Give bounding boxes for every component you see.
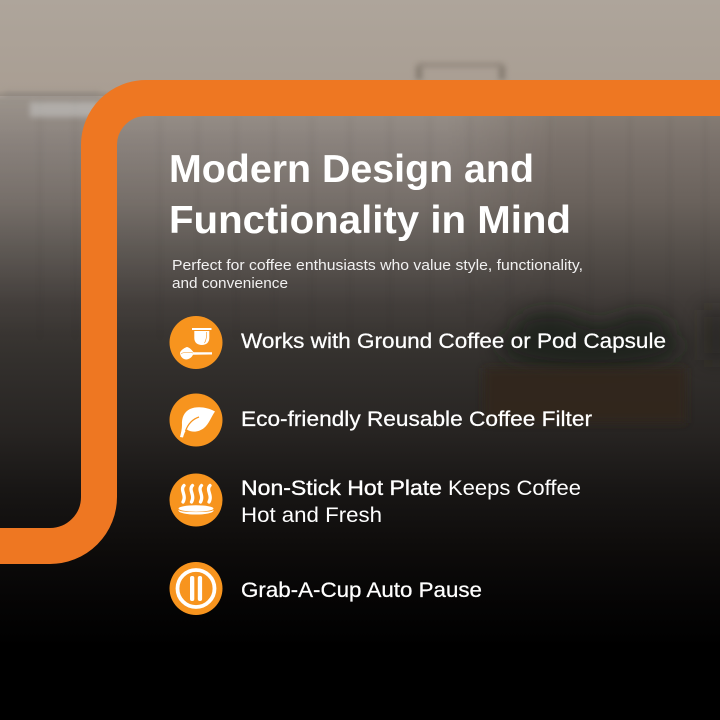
icon: leaf [170,394,222,446]
text: Eco-friendly Reusable Coffee Filter [241,407,592,431]
feature: reusable filter [170,394,592,446]
icon: pause button [170,562,222,615]
text: Keeps Coffee [448,476,581,500]
feature: ground coffee or pod [170,316,666,369]
subtitle [172,258,583,292]
subtitle: Perfect for coffee enthusiasts who value style, functionality, [172,258,583,274]
title: Modern Design and [169,148,534,191]
text: Non-Stick Hot Plate [241,476,442,500]
icon: pod capsule and scoop [170,316,222,369]
text [241,476,581,527]
orange frame line [0,98,720,546]
icon: hot plate with steam [170,474,222,526]
feature: hot plate [170,474,581,527]
feature: auto pause [170,562,482,615]
text: Grab-A-Cup Auto Pause [241,578,482,602]
text: Hot and Fresh [241,503,382,527]
subtitle: and convenience [172,276,288,292]
title: Functionality in Mind [169,199,571,242]
text: Works with Ground Coffee or Pod Capsule [241,329,666,353]
title [169,148,571,242]
